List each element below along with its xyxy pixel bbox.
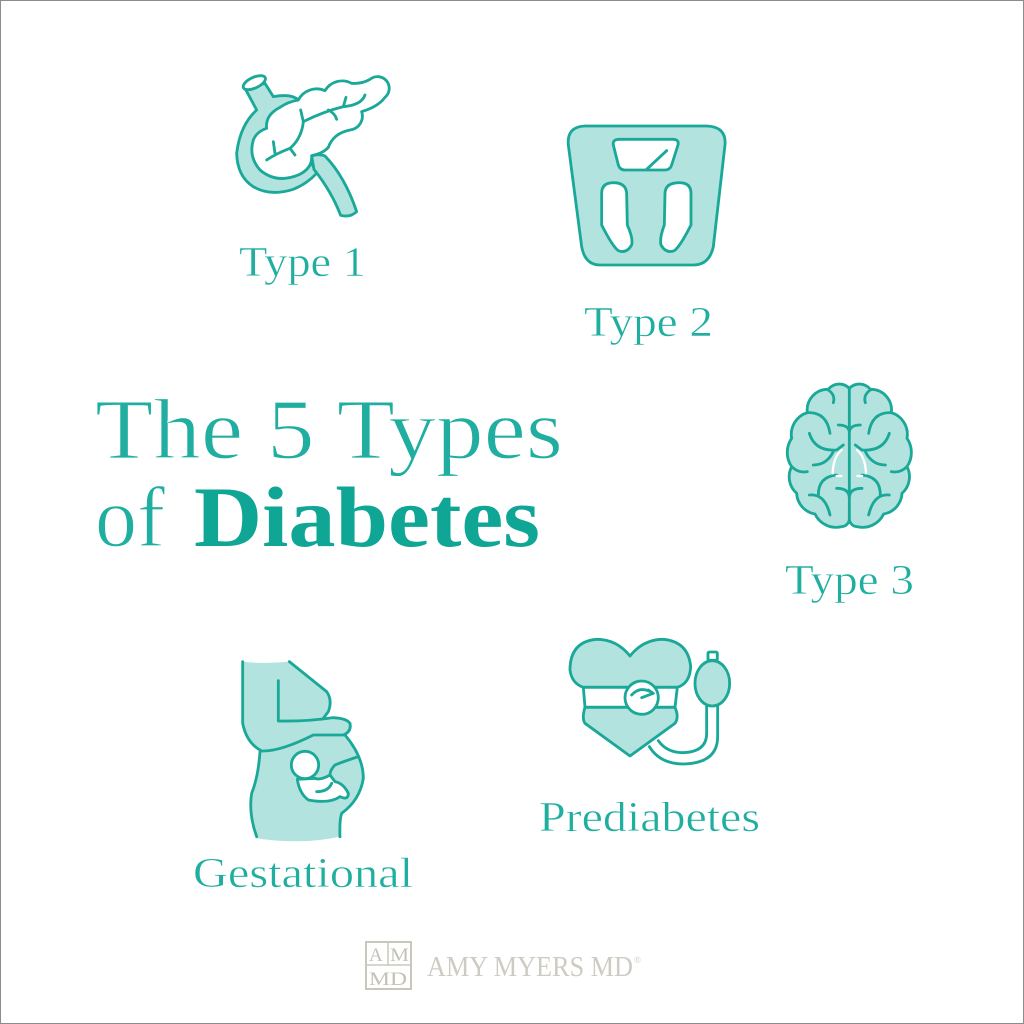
logo: Amy Myers MD: ®: [634, 955, 641, 965]
title: Diabetes: [194, 469, 540, 565]
icon: pregnant body with baby: [243, 662, 363, 841]
logo: Amy Myers MD: M: [390, 945, 409, 966]
label: Type 2: Type 2: [584, 300, 713, 346]
label: Gestational: Gestational: [193, 851, 413, 897]
title: The 5 Types: [95, 381, 563, 477]
title: [95, 381, 563, 565]
logo: Amy Myers MD: A: [369, 945, 383, 966]
label: Prediabetes: Prediabetes: [539, 795, 760, 841]
logo: Amy Myers MD: [366, 942, 641, 990]
label: Type 3: Type 3: [785, 558, 914, 604]
label: Type 1: Type 1: [239, 240, 366, 286]
title: of: [95, 469, 165, 565]
icon: weight scale: [568, 126, 725, 265]
logo: Amy Myers MD: MD: [369, 969, 407, 990]
logo: Amy Myers MD: AMY MYERS MD: [427, 951, 633, 983]
icon: heart with blood pressure cuff: [570, 639, 730, 764]
icon: pancreas: [237, 73, 389, 216]
icon: brain: [787, 384, 911, 527]
